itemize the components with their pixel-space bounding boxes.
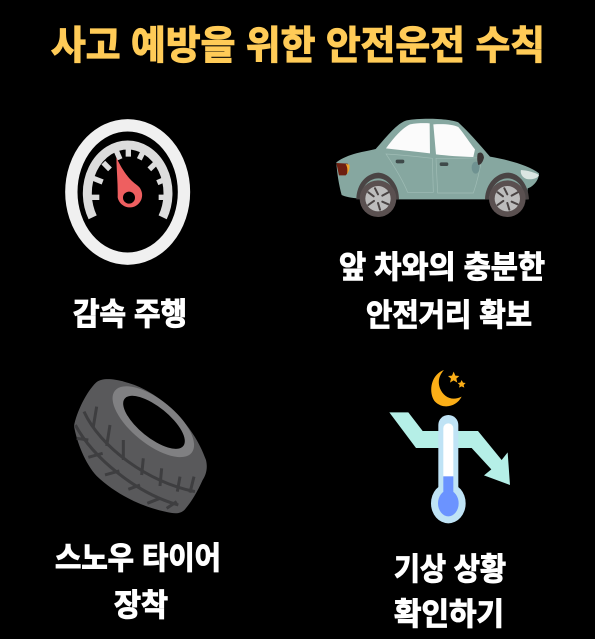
panel: snow tire [55,374,221,623]
panel: safe distance [336,119,545,333]
panel: check weather [389,370,510,632]
label: check weather: 확인하기 [394,597,504,632]
label: check weather [394,552,506,632]
label: check weather: 기상 상황 [394,552,506,587]
label: snow tire: 장착 [114,588,168,623]
label: safe distance [339,250,545,333]
icon: car [336,119,539,217]
icon: tire [74,374,207,513]
icon: speedometer [71,125,184,259]
icon: moon, arrow and thermometer [389,370,510,523]
label: snow tire: 스노우 타이어 [55,541,221,576]
label: safe distance: 앞 차와의 충분한 [339,250,545,285]
title: 사고 예방을 위한 안전운전 수칙 [51,25,545,68]
label: safe distance: 안전거리 확보 [366,298,532,333]
label: snow tire [55,541,221,623]
panel: speed reduction [71,125,187,332]
label: speed reduction: 감속 주행 [73,297,187,332]
